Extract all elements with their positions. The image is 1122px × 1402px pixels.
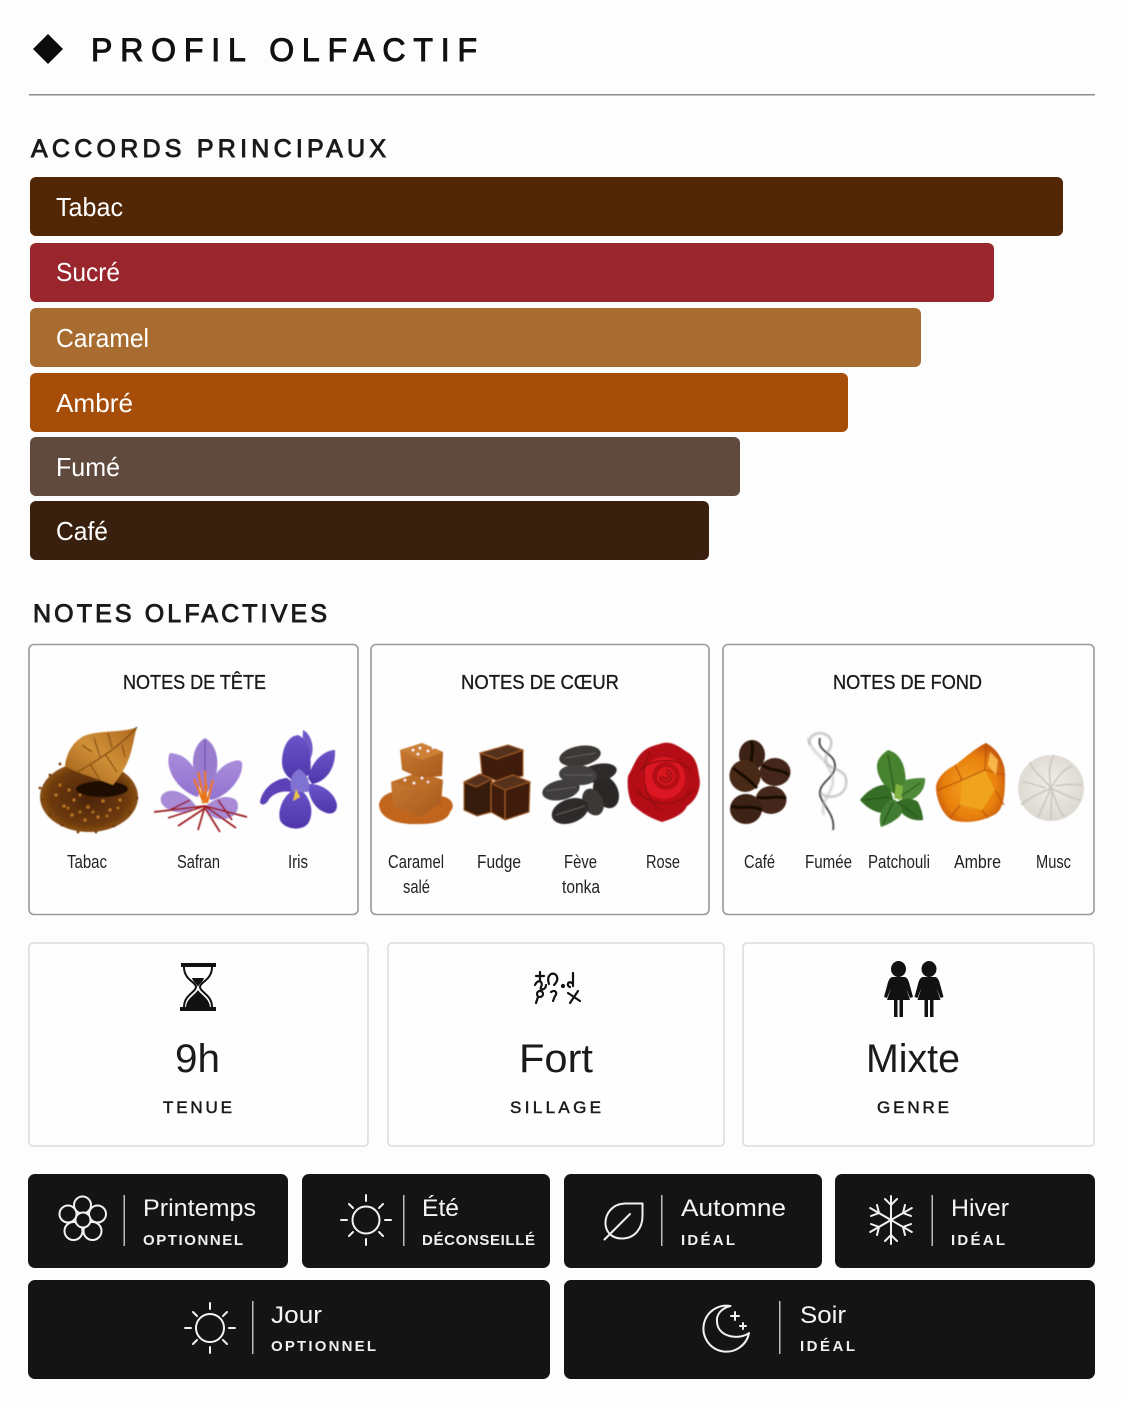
icon: fudge <box>464 745 530 820</box>
bar: Fumé: Fumé <box>56 452 120 482</box>
label: Patchouli: Patchouli <box>868 852 930 872</box>
label: Ambre: Ambre <box>954 852 1001 872</box>
tile: jour <box>28 1280 550 1379</box>
icon: musc <box>1018 755 1084 821</box>
bar: Tabac <box>30 177 1063 236</box>
icon: sillage particles <box>535 972 580 1003</box>
icon: safran <box>154 738 247 832</box>
status: déconseillé: DÉCONSEILLÉ <box>422 1232 535 1249</box>
tile: été <box>302 1174 550 1268</box>
label: Musc: Musc <box>1036 852 1071 872</box>
icon: flower <box>60 1196 106 1240</box>
heading: accords principaux: ACCORDS PRINCIPAUX <box>31 135 386 163</box>
bar: Café: Café <box>56 516 108 546</box>
label: Fudge: Fudge <box>477 852 521 872</box>
label: Fève tonka: tonka <box>562 877 601 897</box>
panel title: NOTES DE FOND <box>833 672 982 694</box>
status: idéal: IDÉAL <box>681 1232 735 1249</box>
title: PROFIL OLFACTIF <box>91 32 477 68</box>
tile: hiver <box>835 1174 1095 1268</box>
label: genre: GENRE <box>877 1098 949 1117</box>
label: sillage: SILLAGE <box>510 1098 601 1117</box>
icon: leaf <box>604 1204 642 1240</box>
icon: sun <box>185 1303 235 1353</box>
bar: Sucré: Sucré <box>56 257 120 287</box>
label: Fève tonka <box>562 852 601 897</box>
header: profil olfactif <box>33 32 477 68</box>
bar: Sucré <box>30 243 994 302</box>
bar: Tabac: Tabac <box>56 192 123 222</box>
icon: sun <box>341 1195 391 1245</box>
panel: notes de tête <box>29 644 358 914</box>
text: jour: Jour <box>271 1302 322 1329</box>
status: optionnel: OPTIONNEL <box>271 1338 376 1355</box>
tile: soir <box>564 1280 1095 1379</box>
bar chart: accords <box>30 177 1063 560</box>
icon: moon and stars <box>703 1306 749 1352</box>
bar: Fumé <box>30 437 740 496</box>
panel: sillage <box>388 943 724 1146</box>
label: Café: Café <box>744 852 775 872</box>
icon: fumée <box>808 733 846 830</box>
label: Rose: Rose <box>646 852 680 872</box>
bar: Ambré <box>30 373 848 432</box>
icon: café <box>725 740 790 824</box>
panel: tenue <box>29 943 368 1146</box>
text: hiver: Hiver <box>951 1195 1009 1222</box>
icon: fève tonka <box>540 743 624 829</box>
icon: two people <box>884 961 944 1017</box>
bar: Caramel <box>30 308 921 367</box>
panel: notes de cœur <box>371 644 709 914</box>
label: tenue: TENUE <box>163 1098 232 1117</box>
icon: caramel salé <box>379 743 453 824</box>
text: printemps: Printemps <box>143 1195 256 1222</box>
tile: printemps <box>28 1174 288 1268</box>
status: idéal: IDÉAL <box>951 1232 1005 1249</box>
icon: patchouli <box>860 750 925 827</box>
bar: Café <box>30 501 709 560</box>
label: Fève tonka: Fève <box>564 852 597 872</box>
icon: hourglass <box>180 963 216 1011</box>
bar: Caramel: Caramel <box>56 323 149 353</box>
icon: ambre <box>936 743 1005 822</box>
icon: rose <box>628 743 700 822</box>
label: Safran: Safran <box>177 852 220 872</box>
text: soir: Soir <box>800 1302 846 1329</box>
label: Tabac: Tabac <box>67 852 107 872</box>
panel title: NOTES DE CŒUR <box>461 672 619 694</box>
icon: tabac <box>39 727 138 833</box>
label: Caramel salé <box>388 852 444 897</box>
panel title: NOTES DE TÊTE <box>123 671 266 694</box>
status: optionnel: OPTIONNEL <box>143 1232 243 1249</box>
tile: automne <box>564 1174 822 1268</box>
panel: notes de fond <box>723 644 1094 914</box>
label: Iris: Iris <box>288 852 308 872</box>
value: 9h: 9h <box>175 1037 220 1081</box>
label: Caramel salé: salé <box>403 877 430 897</box>
value: Fort: Fort <box>519 1037 593 1081</box>
panel: genre <box>743 943 1094 1146</box>
icon: iris <box>260 730 337 829</box>
label: Fumée: Fumée <box>805 852 852 872</box>
bar: Ambré: Ambré <box>56 388 133 418</box>
text: été: Été <box>422 1195 459 1222</box>
label: Caramel salé: Caramel <box>388 852 444 872</box>
icon: snowflake <box>870 1196 912 1244</box>
icon: diamond <box>33 34 63 64</box>
status: idéal: IDÉAL <box>800 1338 855 1355</box>
value: Mixte: Mixte <box>866 1037 960 1081</box>
heading: notes olfactives: NOTES OLFACTIVES <box>33 600 327 628</box>
text: automne: Automne <box>681 1195 786 1222</box>
